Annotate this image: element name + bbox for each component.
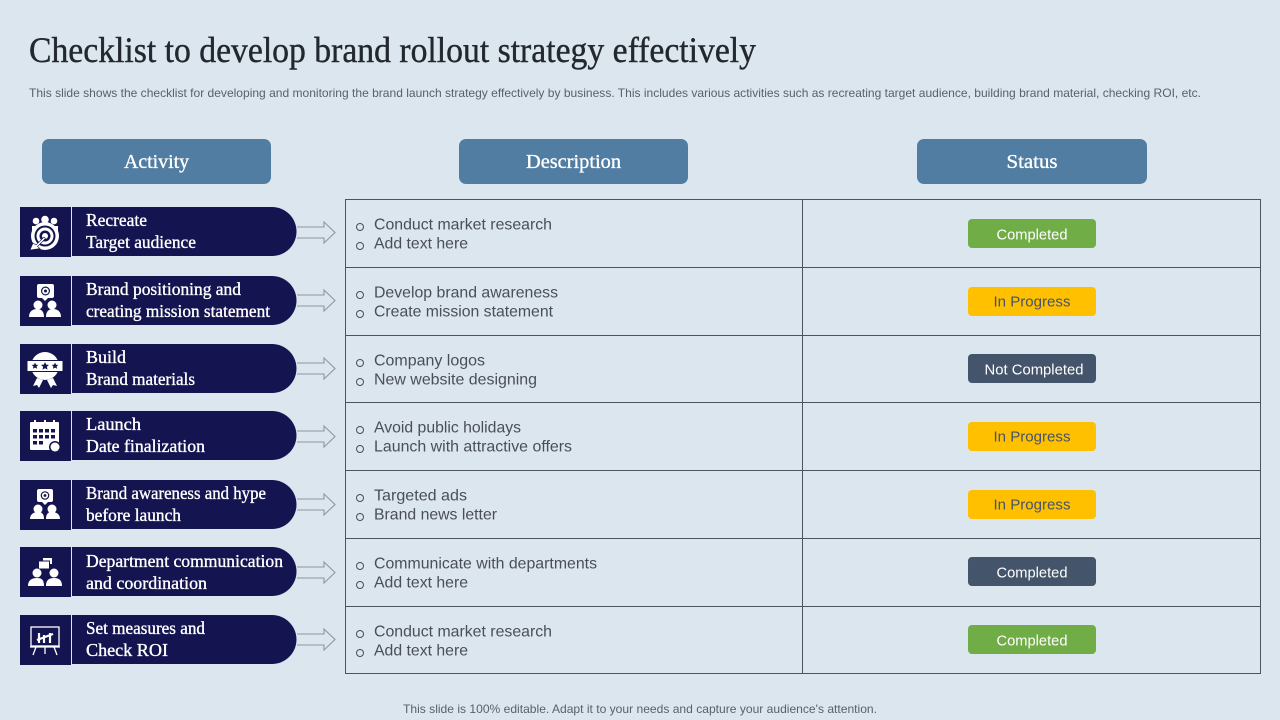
description row 1: Conduct market research <box>374 216 552 234</box>
activity row 1: recreate target audience: Recreate <box>86 210 147 230</box>
arrow 4 <box>297 426 335 447</box>
description row 5: Targeted ads <box>374 488 467 504</box>
status badge 5: in progress <box>968 490 1096 519</box>
subtitle: This slide shows the checklist for developing and monitoring the brand launch strategy effectively by business. This includes various activities such as recreating target audience, building brand material, checking ROI, etc. <box>29 86 1201 100</box>
status badge 2: in progress <box>968 287 1096 316</box>
status badge 3: not completed <box>968 354 1096 383</box>
arrow 2 <box>297 290 335 311</box>
status badge 1: completed: Completed <box>996 228 1068 244</box>
arrow 7 <box>297 629 335 650</box>
activity row 2: brand positioning <box>20 276 296 326</box>
status badge 7: completed <box>968 625 1096 654</box>
activity row 6: department communication: and coordination <box>86 573 207 593</box>
description row 4: Avoid public holidays <box>374 420 521 436</box>
column header: Activity: Activity <box>124 151 189 173</box>
activity row 1: recreate target audience: Target audience <box>86 232 196 252</box>
title: Checklist to develop brand rollout strategy effectively <box>29 30 756 70</box>
description row 7: Conduct market research <box>374 624 552 640</box>
activity row 7: set measures: Set measures and <box>86 618 205 638</box>
status badge 6: completed <box>968 557 1096 586</box>
description row 7 <box>356 624 552 660</box>
status badge 1: completed <box>968 219 1096 248</box>
description row 1: Add text here <box>374 236 468 252</box>
activity row 4: launch date: Launch <box>86 414 141 434</box>
description row 5: Brand news letter <box>374 506 498 524</box>
icon: badge with stars <box>27 352 63 388</box>
activity row 5: brand awareness: Brand awareness and hype <box>86 483 266 503</box>
status badge 4: in progress: In Progress <box>994 430 1070 446</box>
footer note: This slide is 100% editable. Adapt it to your needs and capture your audience's attention. <box>403 702 877 716</box>
status badge 2: in progress: In Progress <box>994 294 1070 310</box>
description row 3 <box>356 352 537 388</box>
description row 2: Develop brand awareness <box>374 284 558 302</box>
description row 5 <box>356 488 498 524</box>
description row 4: Launch with attractive offers <box>374 438 572 456</box>
column header: Status <box>917 139 1147 184</box>
arrow 3 <box>297 358 335 379</box>
activity row 2: brand positioning: Brand positioning and <box>86 279 241 299</box>
activity row 3: build brand materials: Brand materials <box>86 369 195 389</box>
checklist table grid <box>346 200 1260 674</box>
icon: people with target bubble <box>29 284 61 317</box>
description row 3: Company logos <box>374 352 485 370</box>
icon: calendar <box>30 420 61 453</box>
activity row 7: set measures: Check ROI <box>86 640 168 660</box>
column header: Description: Description <box>526 151 621 173</box>
icon: target audience <box>30 216 59 250</box>
description row 3: New website designing <box>374 372 537 388</box>
description row 2: Create mission statement <box>374 304 554 320</box>
column header: Activity <box>42 139 271 184</box>
description row 7: Add text here <box>374 642 468 660</box>
activity row 2: brand positioning: creating mission statement <box>86 301 270 321</box>
description row 2 <box>356 284 558 320</box>
icon: team with chat <box>28 558 62 586</box>
status badge 3: not completed: Not Completed <box>984 362 1084 378</box>
description row 6: Add text here <box>374 574 468 592</box>
activity row 4: launch date: Date finalization <box>86 436 205 456</box>
activity row 6: department communication: Department communication <box>86 551 283 571</box>
description row 4 <box>356 420 572 456</box>
arrow 5 <box>297 494 335 515</box>
icon: people with target bubble <box>30 489 60 519</box>
column header: Description <box>459 139 688 184</box>
status badge 6: completed: Completed <box>996 566 1068 582</box>
column header: Status: Status <box>1006 151 1058 173</box>
activity row 7: set measures <box>20 615 296 665</box>
activity row 1: recreate target audience <box>20 207 296 257</box>
arrow 1 <box>297 222 335 243</box>
arrow 6 <box>297 562 335 583</box>
activity row 4: launch date <box>20 411 296 461</box>
icon: presentation board <box>30 627 60 655</box>
status badge 5: in progress: In Progress <box>994 498 1070 514</box>
description row 6: Communicate with departments <box>374 556 597 572</box>
activity row 5: brand awareness <box>20 480 296 530</box>
activity row 5: brand awareness: before launch <box>86 505 181 525</box>
activity row 3: build brand materials: Build <box>86 347 126 367</box>
status badge 7: completed: Completed <box>996 634 1068 650</box>
activity row 3: build brand materials <box>20 344 296 394</box>
activity row 6: department communication <box>20 547 296 597</box>
description row 6 <box>356 556 597 592</box>
description row 1 <box>356 216 552 252</box>
status badge 4: in progress <box>968 422 1096 451</box>
